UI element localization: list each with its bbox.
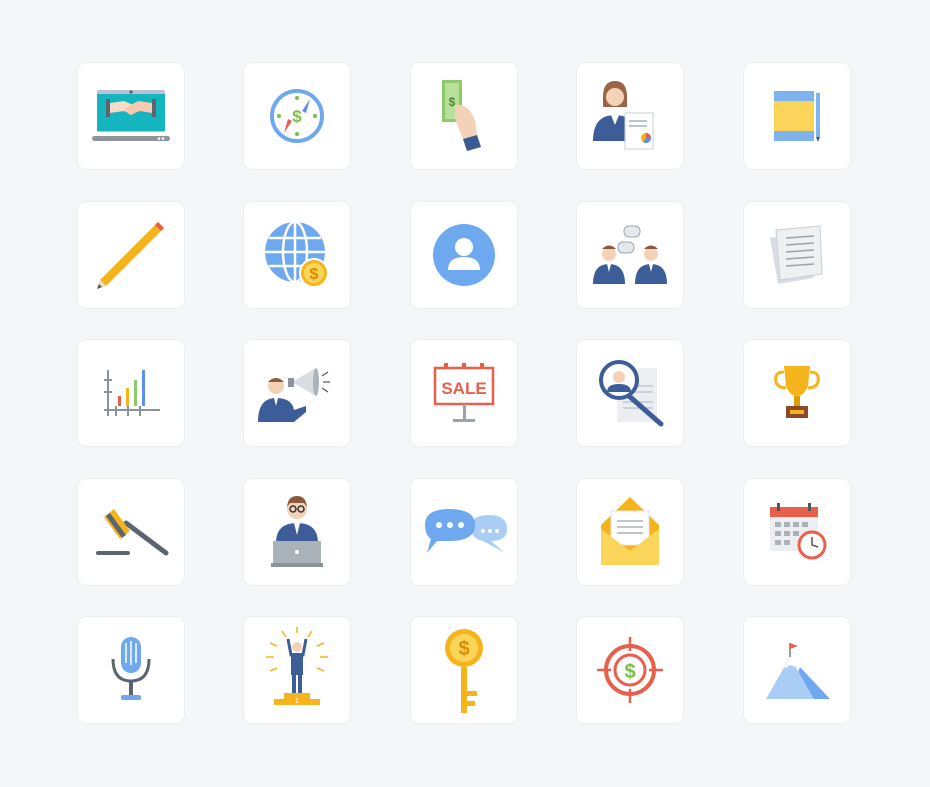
card: calendar clock [744,479,850,585]
card: winner podium: 1 [295,698,299,705]
card: laptop handshake [78,63,184,169]
card: envelope [577,479,683,585]
card: coin key [411,617,517,723]
card: microphone [78,617,184,723]
card: globe dollar: $ [310,266,319,283]
card: hand with money [411,63,517,169]
card: businesswoman report [577,63,683,169]
card: compass [244,63,350,169]
card: target dollar [577,617,683,723]
card: target dollar: $ [624,661,636,683]
card: two men chatting [577,202,683,308]
card: trophy [744,340,850,446]
card: hand with money: $ [449,95,456,109]
card: search person [577,340,683,446]
card: man megaphone [244,340,350,446]
card: winner podium [244,617,350,723]
card: sale billboard: SALE [441,379,487,398]
card: compass: $ [292,107,302,126]
card: globe dollar [244,202,350,308]
card: coin key: $ [458,638,470,660]
card: man at laptop [244,479,350,585]
card: bar chart [78,340,184,446]
card: gavel [78,479,184,585]
card: notebook [744,63,850,169]
card: sale billboard [411,340,517,446]
card: speech bubbles [411,479,517,585]
card: pencil [78,202,184,308]
card: user avatar [411,202,517,308]
card: papers [744,202,850,308]
card: mountain flag [744,617,850,723]
